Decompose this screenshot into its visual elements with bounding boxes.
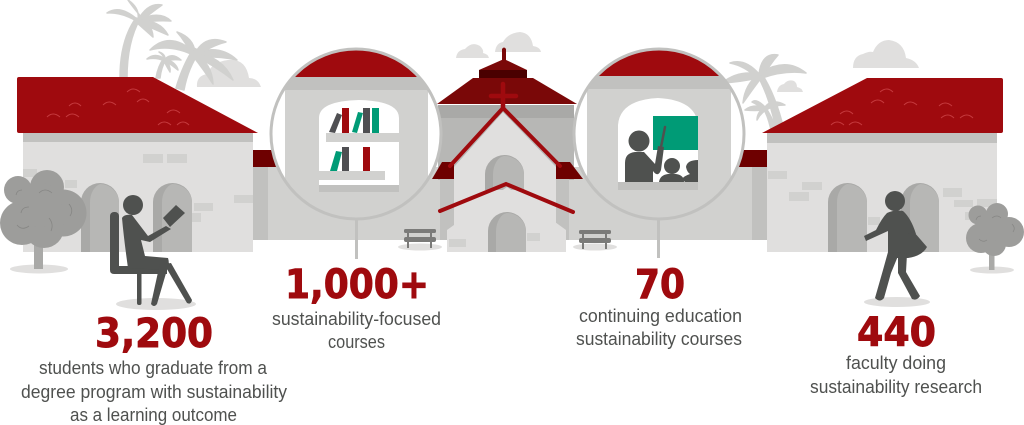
palm trees left	[107, 0, 237, 90]
bench left	[398, 229, 442, 250]
central chapel	[432, 48, 583, 252]
magnifier circle: bookshelf	[270, 48, 442, 222]
icon: teacher at board	[618, 98, 698, 190]
icon: bookshelf window	[319, 100, 399, 192]
number 440: 440	[857, 310, 936, 356]
bench right	[573, 230, 617, 250]
left building	[17, 77, 258, 252]
connector line to courses	[355, 219, 358, 259]
number 1,000+: 1,000+	[285, 262, 429, 308]
description: courses: courses	[328, 332, 385, 352]
person: student reading	[110, 195, 196, 310]
stat: continuing education	[576, 262, 742, 349]
connector line to continuing education	[657, 219, 660, 258]
description: continuing education: sustainability courses	[576, 329, 742, 349]
stat: courses	[272, 262, 441, 352]
description: courses: sustainability-focused	[272, 309, 441, 329]
palm trees right	[722, 55, 806, 130]
tree right	[966, 203, 1024, 274]
description: continuing education	[576, 306, 742, 349]
magnifier circle: classroom	[572, 48, 746, 222]
right connecting wall	[566, 150, 767, 240]
stat: students	[21, 311, 287, 425]
description: students: degree program with sustainability	[21, 382, 287, 402]
person: faculty walking	[864, 191, 930, 307]
description: continuing education: continuing education	[579, 306, 742, 326]
left connecting wall	[253, 150, 448, 240]
right building	[762, 78, 1003, 252]
number 3,200: 3,200	[95, 311, 213, 357]
description: students: students who graduate from a	[39, 358, 268, 378]
description: courses	[272, 309, 441, 352]
description: students	[21, 358, 287, 425]
tree left	[0, 170, 86, 274]
description: students: as a learning outcome	[70, 405, 237, 425]
clouds background	[197, 32, 919, 92]
number 70: 70	[635, 262, 685, 308]
description: faculty	[810, 353, 982, 397]
description: faculty: sustainability research	[810, 377, 982, 397]
stat: faculty	[810, 310, 982, 397]
description: faculty: faculty doing	[846, 353, 946, 373]
